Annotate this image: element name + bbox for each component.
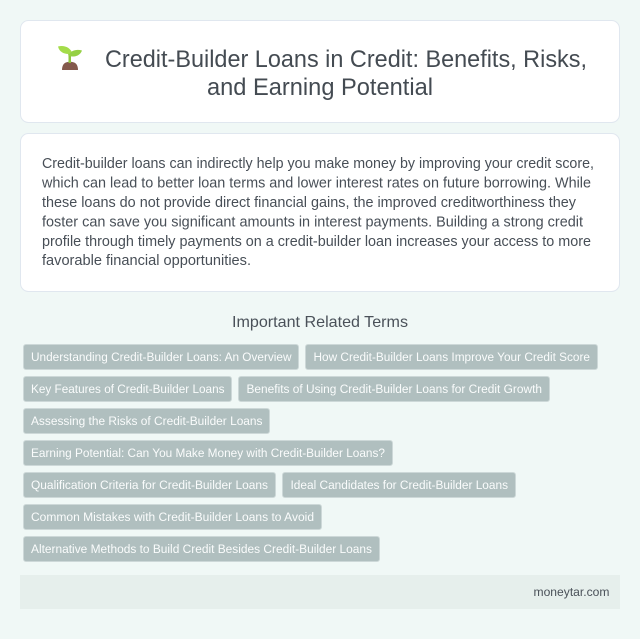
tag: risks: Assessing the Risks of Credit-Builder Loans [31, 414, 262, 428]
footer [20, 575, 620, 609]
tag: earning potential [24, 440, 392, 466]
tag: ideal candidates: Ideal Candidates for Credit-Builder Loans [290, 478, 508, 492]
text block: summary paragraph: foster can save you significant amounts in interest payments. Building a strong credit [42, 214, 583, 230]
icon: seedling [58, 46, 82, 70]
tag: ideal candidates [282, 472, 516, 498]
text block: summary paragraph: profile through timely payments on a credit-builder loan increases your access to more [42, 234, 591, 250]
tag: common mistakes: Common Mistakes with Credit-Builder Loans to Avoid [31, 510, 314, 524]
tag: risks [24, 408, 270, 434]
tag: credit score: How Credit-Builder Loans Improve Your Credit Score [314, 350, 590, 364]
panel: summary card [20, 134, 620, 292]
tag: common mistakes [24, 504, 322, 530]
tag: overview: Understanding Credit-Builder Loans: An Overview [31, 350, 292, 364]
text block: summary paragraph: which can lead to better loan terms and lower interest rates on future borrowing. While [41, 176, 591, 192]
tag: qualification: Qualification Criteria for Credit-Builder Loans [31, 478, 268, 492]
tag: benefits [238, 376, 550, 402]
tag: alternatives: Alternative Methods to Build Credit Besides Credit-Builder Loans [31, 542, 372, 556]
tag: key features [24, 376, 232, 402]
panel: header card [20, 20, 620, 122]
tag: key features: Key Features of Credit-Builder Loans [31, 382, 224, 396]
tag: qualification [24, 472, 276, 498]
tag: benefits: Benefits of Using Credit-Builder Loans for Credit Growth [246, 382, 542, 396]
tag: overview [24, 344, 298, 370]
title [105, 46, 587, 101]
text block: summary paragraph: Credit-builder loans can indirectly help you make money by improving your credit score, [42, 156, 594, 172]
title: and Earning Potential [207, 74, 433, 101]
heading: important related terms: Important Related Terms [232, 314, 408, 331]
tag list [24, 344, 598, 562]
text block: summary paragraph: favorable financial opportunities. [42, 253, 251, 269]
title: Credit-Builder Loans in Credit: Benefits, Risks, [105, 46, 587, 73]
tag: alternatives [24, 536, 380, 562]
text block: summary paragraph [41, 156, 594, 269]
footer: site name: moneytar.com [534, 585, 610, 599]
tag: earning potential: Earning Potential: Can You Make Money with Credit-Builder Loans? [31, 446, 385, 460]
text block: summary paragraph: these loans do not provide direct financial gains, the improved creditworthiness they [42, 195, 577, 211]
tag: credit score [306, 344, 598, 370]
